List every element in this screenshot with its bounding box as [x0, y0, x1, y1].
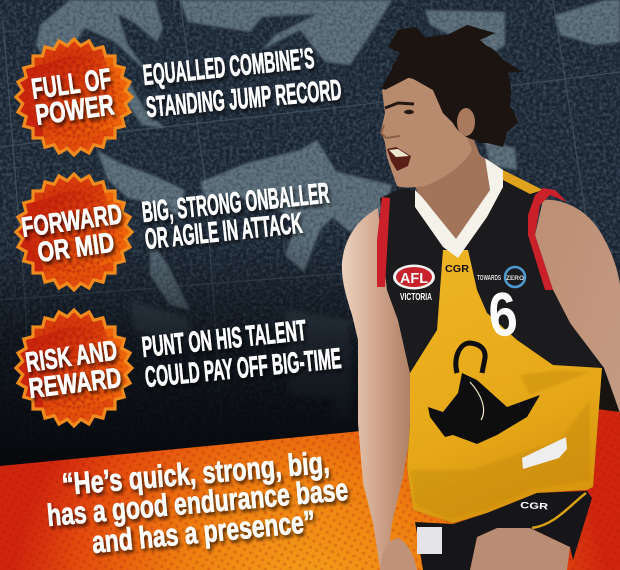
player: towards zero logo: TOWARDS [477, 275, 501, 282]
player: shorts [415, 491, 592, 570]
headline: punt on his talent could pay off big-time: PUNT ON HIS TALENT [140, 315, 308, 364]
player: mouth [387, 147, 411, 171]
headline: big, strong onballer or agile in attack: BIG, STRONG ONBALLER [140, 177, 331, 229]
headline: big, strong onballer or agile in attack [140, 177, 331, 256]
player: shorts sponsor patch [417, 527, 442, 554]
player: nose shadow [381, 125, 400, 138]
player: manta ray logo [428, 343, 540, 444]
player: leg [470, 528, 570, 570]
player photo [342, 25, 620, 570]
player: hair [382, 25, 523, 147]
player: small AFL patch [522, 437, 567, 469]
player: left arm [342, 208, 416, 570]
badge text: forward or mid: FORWARD [20, 198, 124, 243]
quote text: “He’s quick, strong, big, [61, 445, 331, 502]
player: red left armhole trim [377, 197, 390, 287]
badge text: full of power: FULL OF [30, 63, 113, 106]
player: shorts gold stripe [532, 493, 586, 528]
badge: forward or mid [14, 172, 134, 292]
badge text: risk and reward: RISK AND [24, 334, 119, 378]
player: ear [457, 108, 475, 136]
headline: equalled combine's standing jump record: STANDING JUMP RECORD [145, 74, 343, 124]
quote text [46, 445, 349, 560]
player: right arm [535, 200, 620, 413]
player: CGR logo: CGR [445, 264, 470, 275]
headline: big, strong onballer or agile in attack: OR AGILE IN ATTACK [143, 208, 304, 256]
player: AFL badge [393, 264, 435, 290]
badge: risk and reward [14, 308, 134, 428]
player: jersey fold shading [410, 370, 590, 520]
player: gold jersey panel [407, 250, 602, 523]
player: towards zero logo: ZERO [506, 275, 524, 282]
player: hand [380, 538, 417, 570]
badge: full of power [14, 37, 134, 157]
badge text: full of power: POWER [34, 89, 116, 132]
badge text: risk and reward: REWARD [27, 362, 123, 404]
player: shorts CGR logo: CGR [520, 500, 549, 511]
headline: punt on his talent could pay off big-time: COULD PAY OFF BIG-TIME [144, 343, 343, 394]
player: number 6: 6 [485, 280, 521, 351]
headline: equalled combine's standing jump record: EQUALLED COMBINE’S [141, 43, 316, 92]
player: red right armhole trim [528, 188, 567, 290]
player: face [381, 77, 476, 188]
player: white collar [415, 158, 503, 258]
badge text: full of power [30, 63, 116, 132]
badge text: forward or mid: OR MID [36, 227, 116, 268]
orange quote band [0, 406, 620, 570]
headline: punt on his talent could pay off big-time [140, 315, 343, 394]
player: eyebrow and eye [385, 103, 414, 114]
badge text: forward or mid [20, 198, 124, 268]
quote text: has a good endurance base [46, 472, 349, 533]
player: back of jersey behind arm [596, 360, 620, 412]
player: VICTORIA label: VICTORIA [400, 292, 432, 303]
headline: equalled combine's standing jump record [141, 43, 343, 124]
player: neck [413, 130, 503, 240]
player: towards zero logo [477, 267, 525, 287]
player: AFL badge: AFL [400, 270, 428, 287]
badge text: risk and reward [24, 334, 123, 404]
quote text: and has a presence” [90, 504, 317, 560]
player: gold shoulder strip [503, 170, 543, 194]
player: jersey body [380, 158, 602, 523]
